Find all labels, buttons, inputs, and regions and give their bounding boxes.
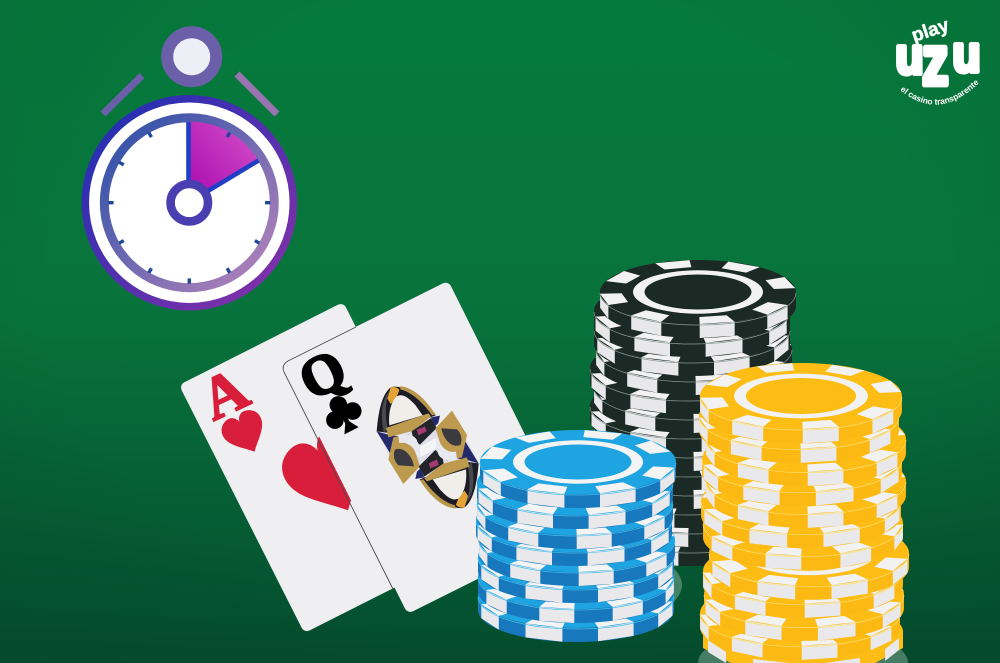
logo letter: second u: u (952, 26, 981, 83)
stopwatch centre hub (171, 184, 208, 221)
ace letter: A (191, 355, 258, 433)
chip stack: black (590, 260, 796, 566)
logo word: play: play (909, 15, 952, 47)
queen letter: Q (289, 337, 356, 412)
stopwatch knob (167, 32, 216, 81)
stopwatch ticks (108, 133, 270, 284)
logo: playuzu (896, 15, 981, 105)
club suit (318, 388, 368, 439)
stopwatch elapsed sector (189, 122, 258, 203)
stopwatch right lug (237, 74, 277, 114)
logo tagline: el casino transparente (901, 80, 978, 105)
chip stack: yellow (699, 363, 909, 663)
logo letter: first u: u (896, 28, 924, 85)
stopwatch inner ring (104, 118, 274, 288)
stopwatch hands (188, 122, 258, 203)
stopwatch outer ring (85, 99, 293, 307)
stopwatch left lug (103, 76, 142, 114)
chip stack: blue (476, 430, 676, 642)
card: queen of clubs (283, 281, 573, 614)
small heart (217, 406, 273, 461)
logo letter: z: z (922, 23, 949, 100)
card: ace of hearts (179, 302, 469, 633)
queen figure (377, 385, 479, 509)
large heart (273, 418, 385, 529)
icon: stopwatch (85, 32, 293, 307)
chip stack shadows (518, 501, 908, 663)
